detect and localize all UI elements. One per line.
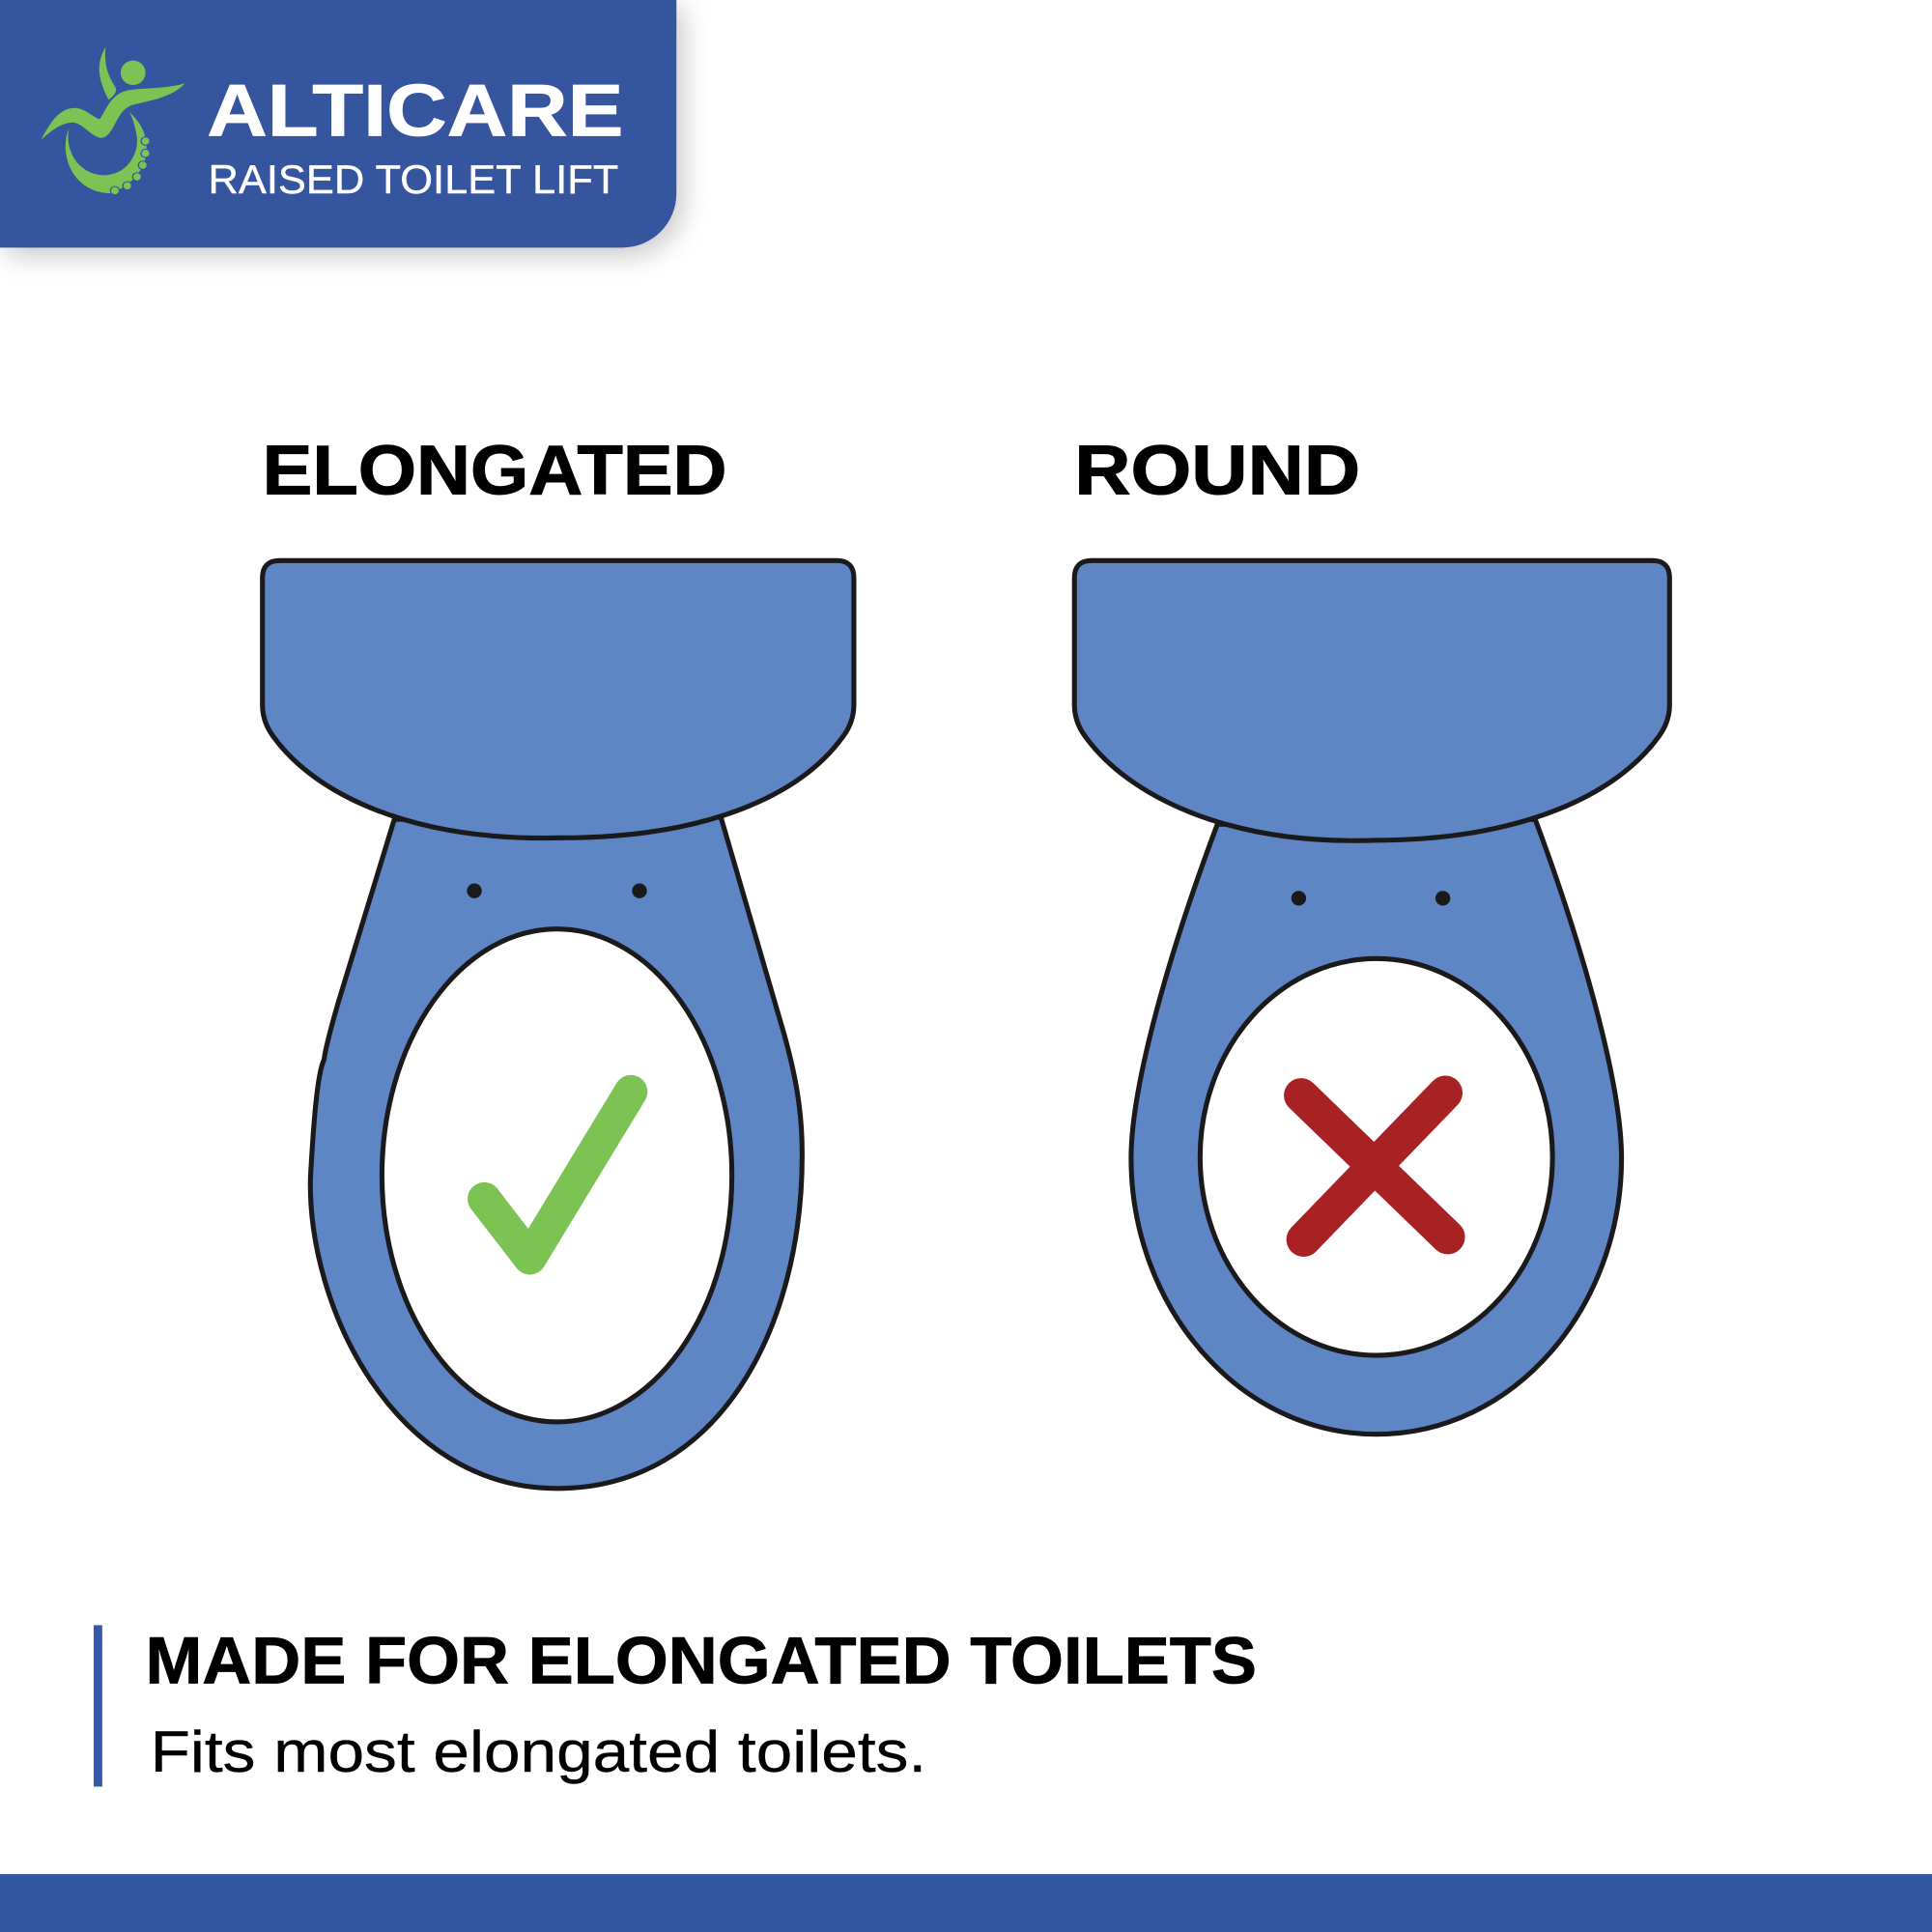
hinge dots <box>1292 891 1450 906</box>
callout body: Fits most elongated toilets. <box>151 1719 926 1784</box>
hinge dots <box>467 884 647 898</box>
callout <box>94 1623 1257 1786</box>
product name: RAISED TOILET LIFT <box>209 156 618 202</box>
footer band <box>0 1874 1932 1932</box>
callout heading: MADE FOR ELONGATED TOILETS <box>146 1623 1257 1697</box>
brand name: ALTICARE <box>207 70 623 152</box>
accent bar <box>94 1625 102 1786</box>
bowl <box>1131 819 1622 1435</box>
lid <box>263 560 854 838</box>
toilet: elongated <box>263 560 854 1489</box>
seat opening <box>1200 958 1552 1355</box>
heading: round: ROUND <box>1074 431 1360 509</box>
header panel: brand <box>0 0 676 247</box>
heading: elongated: ELONGATED <box>263 431 727 509</box>
icon: red cross <box>1301 1093 1448 1239</box>
bowl <box>310 817 802 1489</box>
seat opening <box>382 929 732 1422</box>
toilet: round <box>1074 560 1669 1435</box>
icon: Alticare logo <box>41 47 185 195</box>
lid <box>1074 560 1669 840</box>
icon: check mark <box>484 1092 631 1258</box>
